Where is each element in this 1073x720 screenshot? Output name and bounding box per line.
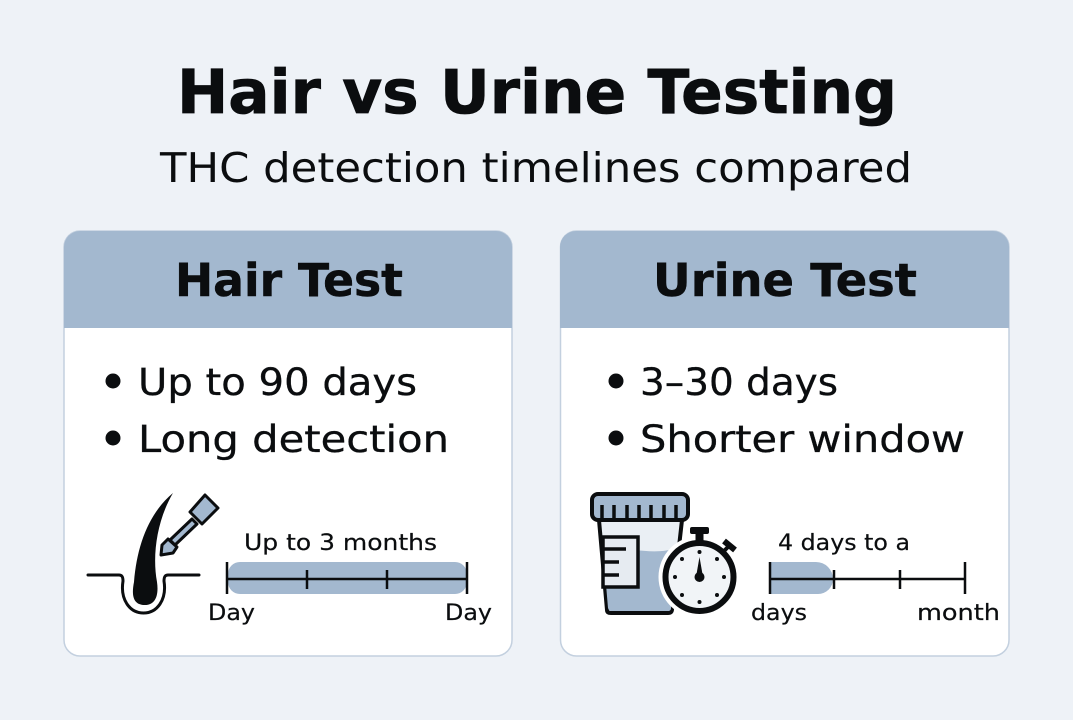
timeline label: 4 days to a (778, 531, 910, 556)
timeline bar (771, 562, 833, 594)
timeline label: Up to 3 months (244, 531, 437, 556)
card background (64, 231, 512, 656)
end label: Day (445, 601, 492, 626)
timeline axis (227, 562, 467, 594)
bullet list: urine test: Shorter window (640, 418, 965, 461)
icon: hair follicle and tweezers (88, 493, 218, 613)
card background (560, 231, 1009, 656)
timeline bar (228, 562, 467, 594)
timeline: urine test (751, 531, 1000, 626)
subtitle: THC detection timelines compared (159, 144, 912, 192)
end label: month (917, 601, 1000, 626)
bullet list: hair test: Long detection (138, 418, 449, 461)
heading: hair test: Hair Test (175, 254, 403, 307)
bullet list: hair test (106, 361, 449, 461)
card header: hair test (64, 231, 512, 328)
panel: hair test (64, 231, 512, 656)
panel: urine test (560, 231, 1009, 656)
card header: urine test (560, 231, 1009, 328)
timeline: hair test (208, 531, 492, 626)
bullet list: urine test: 3–30 days (640, 361, 838, 404)
start label: days (751, 601, 807, 626)
heading: urine test: Urine Test (653, 254, 917, 307)
bullet list: urine test (608, 361, 965, 461)
title: Hair vs Urine Testing (177, 57, 897, 128)
start label: Day (208, 601, 255, 626)
icon: specimen cup and stopwatch (592, 494, 740, 618)
timeline axis (770, 562, 965, 594)
bullet list: hair test: Up to 90 days (138, 361, 417, 404)
